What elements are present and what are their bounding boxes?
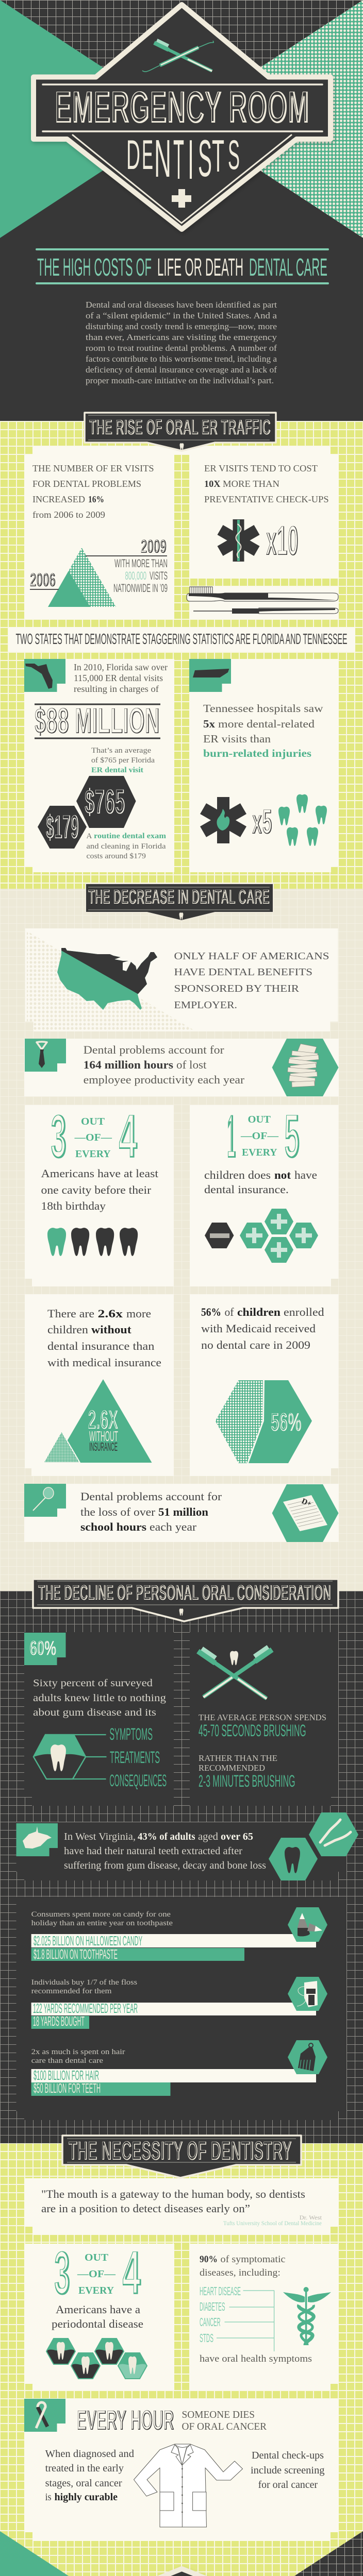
- title: dentists: D: [126, 132, 140, 178]
- text: sixty percent: Sixty percent of surveyed: [33, 1677, 153, 1689]
- intro paragraph: room to treat routine dental problems. A number of: [86, 343, 277, 353]
- text: west virginia: over 65: [221, 1831, 253, 1842]
- text: floss: Individuals buy 1/7 of the floss: [31, 1978, 137, 1987]
- stat: 3 out of every 4 periodontal: [54, 2239, 141, 2308]
- text: periodontal disease: [52, 2303, 143, 2330]
- bar chart: hair vs teeth: $100 BILLION FOR HAIR: [34, 2067, 99, 2083]
- text: highly curable: stages, oral cancer: [45, 2478, 122, 2489]
- stat: 3 out of every 4: —OF—: [74, 1132, 112, 1143]
- text: 90 percent of diseases: 90%: [200, 2254, 218, 2265]
- icon: lab coat: [134, 2444, 242, 2527]
- text: periodontal disease: Americans have a: [56, 2303, 140, 2316]
- section header: the rise of oral er traffic: [85, 413, 276, 451]
- bar chart: hair vs teeth: $50 BILLION FOR TEETH: [34, 2080, 101, 2096]
- text: sixty percent: about gum disease and its: [33, 1707, 156, 1718]
- stat: 3 out of every 4: 3: [51, 1102, 67, 1171]
- icon: four teeth: [47, 1228, 138, 1256]
- stat: 1 out of every 5: EVERY: [242, 1147, 277, 1158]
- icon: tooth and pliers hexagons: [269, 1812, 358, 1880]
- text: school hours: school hours: [80, 1520, 146, 1533]
- icon: plus and minus hexagons: [205, 1209, 318, 1263]
- intro paragraph: disturbing and costly trend is emerging—now, more: [86, 321, 277, 331]
- intro paragraph: Dental and oral diseases have been identified as part: [86, 300, 277, 310]
- text: er visits increased: from 2006 to 2009: [32, 510, 105, 520]
- section 3 panels: [24, 928, 339, 1542]
- title: dentists: T: [173, 128, 184, 191]
- text: school hours: the loss of over: [80, 1505, 156, 1518]
- text: 2.6x more children: 2.6x: [98, 1307, 123, 1320]
- footer background triangles: [0, 2531, 363, 2576]
- text: 56 percent medicaid: with Medicaid received: [201, 1322, 316, 1335]
- text: 56 percent medicaid: of: [225, 1306, 234, 1318]
- intro paragraph: proper mouth-care initiative on the individual’s part.: [86, 376, 274, 385]
- icon: crossed toothbrushes with tooth: [196, 1644, 274, 1701]
- stat: 3 out of every 4: 4: [119, 1102, 138, 1171]
- text: average per visit: [91, 747, 155, 774]
- text: er visits increased: 16%: [88, 494, 104, 504]
- text: florida er visits: 115,000 ER dental visits: [74, 673, 163, 683]
- stat: 1 out of every 5: OUT: [248, 1114, 271, 1125]
- quote: "The mouth is a gateway to the human body, so dentists: [41, 2188, 305, 2200]
- icon: cost hexagons: $765: [85, 783, 125, 821]
- chart: rising triangle 2006 to 2009: WITH MORE THAN: [114, 557, 168, 570]
- text: lost productivity: Dental problems account for: [84, 1043, 224, 1056]
- chart: rising triangle 2006 to 2009: VISITS: [150, 569, 168, 582]
- text: brushing time: RATHER THAN THE: [199, 1753, 277, 1763]
- stat block: 60 percent: 60%: [30, 1637, 56, 1659]
- text: 90 percent of diseases: [200, 2254, 286, 2278]
- stat: 88 million: [35, 701, 160, 741]
- intro paragraph: than ever, Americans are visiting the emergency: [86, 332, 277, 342]
- text: west virginia: suffering from gum disease, decay and bone loss: [64, 1860, 266, 1871]
- stat: 3 out of every 4: [51, 1102, 138, 1171]
- subtitle: LIFE OR DEATH: [157, 254, 243, 281]
- text: west virginia: have had their natural teeth extracted after: [64, 1845, 242, 1857]
- text: oral health symptoms: have oral health symptoms: [200, 2353, 312, 2364]
- text: 2.6x more children: with medical insurance: [47, 1356, 161, 1369]
- list: diseases with lines: HEART DISEASE: [200, 2284, 241, 2298]
- icon: necktie: [25, 1039, 66, 1072]
- title badge: S: [228, 132, 240, 178]
- text: er visits cost: ER VISITS TEND TO COST: [204, 463, 318, 473]
- chart: 56 percent hexagon: 56%: [271, 1409, 302, 1436]
- text: lost productivity: 164 million hours: [84, 1058, 173, 1071]
- chart: 2.6x triangles: [43, 1379, 152, 1463]
- text: school hours: [80, 1490, 222, 1533]
- section 5 panels: [24, 2178, 339, 2541]
- bar chart: floss: [31, 2001, 316, 2029]
- text: 56 percent medicaid: enrolled: [284, 1306, 324, 1318]
- conclusion badge: [33, 2569, 329, 2576]
- quote: are in a position to detect diseases early on”: [41, 2202, 250, 2215]
- text: school hours: each year: [150, 1520, 197, 1533]
- text: 90 percent of diseases: of symptomatic: [221, 2254, 286, 2265]
- text: dental check-ups: [251, 2450, 325, 2490]
- text: cavities: 18th birthday: [41, 1199, 106, 1212]
- text: children no insurance: have: [294, 1168, 317, 1181]
- text: er visits cost: [204, 463, 329, 504]
- text: 56 percent medicaid: 56%: [201, 1306, 221, 1318]
- text: floss: [31, 1978, 137, 1995]
- text: 56 percent medicaid: no dental care in 2009: [201, 1338, 310, 1351]
- text: 56 percent medicaid: children: [237, 1306, 280, 1318]
- stat: 1 out of every 5: —OF—: [240, 1130, 279, 1142]
- text: cavities: one cavity before their: [41, 1183, 152, 1196]
- text: brushing time: RECOMMENDED: [199, 1763, 265, 1773]
- text: highly curable: is: [45, 2492, 52, 2503]
- icon: toothbrush and hook comparison: [187, 587, 338, 614]
- title: dentists: N: [154, 129, 171, 188]
- icon: crossed toothbrush and dental hook: [142, 38, 214, 73]
- section background: decrease in dental care: [0, 889, 363, 1591]
- icon: candy corn hexagon: [288, 1907, 327, 1942]
- bar chart: hair vs teeth: [31, 2067, 316, 2096]
- text: average per visit: of $765 per Florida: [91, 756, 155, 765]
- text: florida er visits: In 2010, Florida saw over: [74, 662, 168, 672]
- text: cavities: [41, 1167, 158, 1212]
- quote: [41, 2188, 322, 2227]
- text: 2.6x more children: dental insurance than: [47, 1340, 155, 1352]
- text: lost productivity: of lost: [176, 1058, 206, 1071]
- text: 2.6x more children: children: [47, 1323, 88, 1336]
- text: only half of americans: ONLY HALF OF AMERICANS: [174, 951, 329, 962]
- section header: the necessity of dentistry: [62, 2136, 301, 2178]
- chart: rising triangle 2006 to 2009: 2009: [141, 536, 167, 557]
- icon: mirror: [24, 1484, 66, 1517]
- icon: star of life with flame x5: [200, 797, 272, 843]
- subtitle: THE HIGH COSTS OF: [37, 254, 152, 281]
- map: half of america: [27, 931, 194, 1030]
- text: 56 percent medicaid: [201, 1306, 324, 1351]
- icon: paper stack hexagon: [272, 1039, 338, 1096]
- stat: 3 out of every 4 periodontal: 4: [122, 2239, 141, 2308]
- quote: Tufts University School of Dental Medicine: [223, 2219, 322, 2227]
- intro paragraph: factors contribute to this worrisome trend, including a: [86, 354, 277, 364]
- text: only half of americans: [174, 951, 329, 1011]
- icon: west virginia: [16, 1823, 58, 1856]
- text: children no insurance: dental insurance.: [204, 1183, 289, 1196]
- chart: 2.6x triangles: 2.6X: [88, 1405, 118, 1434]
- text: average per visit: That’s an average: [91, 747, 151, 755]
- bar chart: candy vs toothpaste: $1.8 BILLION ON TOOTHPASTE: [34, 1946, 118, 1962]
- icon: caduceus: [283, 2287, 331, 2345]
- title: dentists: [126, 128, 240, 191]
- text: only half of americans: SPONSORED BY THEIR: [174, 983, 300, 994]
- list: diseases with lines: DIABETES: [200, 2300, 225, 2313]
- text: periodontal disease: periodontal disease: [52, 2317, 143, 2330]
- text: highly curable: treated in the early: [45, 2463, 124, 2474]
- text: tennessee: burn-related injuries: [203, 747, 311, 759]
- icon: tooth with gum and labels: [34, 1725, 167, 1790]
- text: er visits cost: MORE THAN: [223, 479, 279, 489]
- icon: tooth with gum and labels: SYMPTOMS: [109, 1725, 153, 1743]
- subtitle: [37, 249, 328, 283]
- chart: 56 percent hexagon: [216, 1380, 312, 1463]
- icon: five green teeth: [278, 794, 327, 846]
- stat: 1 out of every 5: 1: [227, 1102, 236, 1171]
- title badge: [34, 5, 331, 229]
- chart: 2.6x triangles: WITHOUT: [89, 1428, 118, 1444]
- heading: every hour: SOMEONE DIES: [182, 2409, 255, 2420]
- icon: comb hexagon: [288, 2040, 327, 2074]
- text: children no insurance: children does: [204, 1168, 271, 1181]
- text: tennessee: ER visits than: [203, 733, 271, 745]
- text: x10: [266, 518, 299, 564]
- list: diseases with lines: CANCER: [200, 2315, 221, 2329]
- stat: 3 out of every 4: EVERY: [75, 1148, 111, 1160]
- text: only half of americans: EMPLOYER.: [174, 999, 237, 1011]
- heading: every hour: OF ORAL CANCER: [182, 2421, 267, 2432]
- text: brushing time: THE AVERAGE PERSON SPENDS: [199, 1713, 326, 1722]
- text: school hours: Dental problems account for: [80, 1490, 222, 1503]
- chart: rising triangle 2006 to 2009: [30, 536, 168, 607]
- icon: four gum hexagons: [46, 2338, 147, 2379]
- text: 2.6x more children: without: [91, 1323, 131, 1336]
- icon: tooth with gum and labels: TREATMENTS: [110, 1748, 160, 1767]
- text: west virginia: aged: [198, 1831, 218, 1842]
- text: floss: recommended for them: [31, 1987, 112, 1995]
- text: west virginia: In West Virginia,: [64, 1831, 136, 1842]
- text: sixty percent: adults knew little to nothing: [33, 1692, 166, 1704]
- text: 90 percent of diseases: diseases, including:: [200, 2267, 280, 2278]
- text: west virginia: 43% of adults: [138, 1831, 195, 1842]
- text: er visits cost: 10X: [204, 479, 221, 489]
- icon: awareness ribbon: [24, 2399, 65, 2432]
- section header: the decline of personal oral consideration: [33, 1579, 338, 1621]
- text: cavities: Americans have at least: [41, 1167, 158, 1180]
- text: routine dental exam: [87, 832, 167, 860]
- text: routine dental exam: and cleaning in Florida: [87, 842, 166, 851]
- stat: 1 out of every 5: [227, 1102, 300, 1171]
- chart: rising triangle 2006 to 2009: 2006: [30, 569, 56, 590]
- text: er visits increased: THE NUMBER OF ER VISITS: [32, 463, 154, 473]
- text: dental check-ups: Dental check-ups: [252, 2450, 324, 2461]
- text: tennessee: [203, 702, 323, 759]
- icon: floss box hexagon: [288, 1977, 327, 2011]
- text: hair vs dental: [31, 2048, 125, 2065]
- chart: 2.6x triangles: INSURANCE: [89, 1440, 118, 1453]
- text: florida er visits: [74, 662, 168, 694]
- stat: 3 out of every 4 periodontal: 3: [54, 2239, 71, 2308]
- text: tennessee: more dental-related: [218, 718, 315, 730]
- text: lost productivity: [84, 1043, 245, 1086]
- text: 2.6x more children: [47, 1307, 161, 1369]
- text: dental check-ups: include screening: [251, 2465, 325, 2476]
- text: only half of americans: HAVE DENTAL BENEFITS: [174, 967, 312, 978]
- icon: florida: [24, 659, 65, 692]
- stat: 88 million: $88 MILLION: [35, 701, 160, 741]
- text: CONSEQUENCES: [109, 1771, 167, 1790]
- text: routine dental exam: A: [87, 832, 92, 840]
- text: candy vs toothpaste: Consumers spent more on candy for one: [31, 1910, 171, 1919]
- title: dentists: S: [198, 130, 212, 188]
- text: children no insurance: [204, 1168, 317, 1196]
- title: dentists: T: [212, 130, 224, 181]
- section background: necessity of dentistry: [0, 2143, 363, 2576]
- stat: 3 out of every 4 periodontal: —OF—: [77, 2268, 116, 2280]
- text: routine dental exam: costs around $179: [87, 852, 146, 860]
- bar chart: candy vs toothpaste: [31, 1933, 316, 1962]
- icon: tennessee: [189, 659, 231, 692]
- title: dentists: I: [188, 128, 194, 191]
- stat: 3 out of every 4 periodontal: OUT: [85, 2252, 109, 2263]
- text: school hours: 51 million: [158, 1505, 208, 1518]
- section background: decline of personal oral consideration: [0, 1591, 363, 2143]
- text: west virginia: [64, 1831, 266, 1871]
- chart: rising triangle 2006 to 2009: 800,000: [125, 569, 146, 582]
- text: lost productivity: employee productivity each year: [84, 1073, 245, 1086]
- text: hair vs dental: care than dental care: [31, 2057, 103, 2065]
- text: routine dental exam: routine dental exam: [94, 832, 167, 840]
- section background: rise of oral er traffic: [0, 421, 363, 889]
- text: tennessee: Tennessee hospitals saw: [203, 702, 323, 715]
- list: diseases with lines: STDS: [200, 2331, 213, 2345]
- header background triangles: [0, 0, 363, 421]
- bar chart: floss: 122 YARDS RECOMMENDED PER YEAR: [33, 2001, 138, 2016]
- icon: star of life with flame x5: x5: [252, 803, 272, 841]
- section 2 panels: [8, 446, 355, 872]
- stat: 3 out of every 4 periodontal: EVERY: [78, 2285, 114, 2296]
- bar chart: candy vs toothpaste: $2.025 BILLION ON HALLOWEEN CANDY: [34, 1933, 142, 1948]
- intro paragraph: [86, 300, 277, 385]
- heading: every hour: EVERY HOUR: [77, 2405, 174, 2436]
- text: er visits increased: [32, 463, 154, 520]
- stat block: 60 percent: [24, 1633, 66, 1665]
- text: highly curable: [45, 2448, 134, 2503]
- text: er visits increased: INCREASED: [32, 494, 85, 504]
- text: tennessee: 5x: [203, 718, 216, 730]
- icon: cost hexagons: [38, 776, 136, 849]
- title: dentists: E: [142, 132, 153, 178]
- text: children no insurance: not: [274, 1168, 291, 1181]
- intro paragraph: deficiency of dental insurance coverage and a lack of: [86, 365, 277, 375]
- text: florida er visits: resulting in charges of: [74, 684, 159, 694]
- icon: plus: [172, 189, 191, 208]
- section 4 panels: [16, 1632, 346, 2120]
- list: diseases with lines: [200, 2284, 274, 2351]
- text: highly curable: highly curable: [55, 2492, 118, 2503]
- text: hair vs dental: 2x as much is spent on hair: [31, 2048, 125, 2056]
- icon: star of life x10: [217, 518, 299, 564]
- text: 5: [284, 1102, 300, 1171]
- section header: the decrease in dental care: [86, 884, 273, 921]
- text: 2.6x more children: There are: [47, 1307, 94, 1320]
- text: highly curable: When diagnosed and: [45, 2448, 134, 2460]
- text: candy vs toothpaste: [31, 1910, 173, 1927]
- bar chart: floss: 18 YARDS BOUGHT: [33, 2013, 85, 2029]
- quote: Dr. West: [300, 2214, 322, 2221]
- icon: graded paper hexagon: D+: [301, 1497, 312, 1509]
- icon: cost hexagons: $179: [46, 808, 79, 845]
- text: dental check-ups: for oral cancer: [258, 2479, 318, 2490]
- chart: rising triangle 2006 to 2009: NATIONWIDE IN ’09: [113, 582, 168, 595]
- text: er visits increased: FOR DENTAL PROBLEMS: [32, 479, 141, 489]
- text: 2.6x more children: more: [126, 1307, 151, 1320]
- icon: graded paper hexagon: [272, 1484, 338, 1542]
- text: candy vs toothpaste: holiday than an entire year on toothpaste: [31, 1919, 173, 1927]
- text: er visits cost: PREVENTATIVE CHECK-UPS: [204, 494, 329, 504]
- text: brushing time: [199, 1713, 326, 1790]
- text: average per visit: ER dental visit: [91, 766, 143, 774]
- intro paragraph: of a “silent epidemic” in the United States. And a: [86, 311, 277, 320]
- text: sixty percent: [33, 1677, 166, 1718]
- stat: 3 out of every 4: OUT: [81, 1116, 105, 1127]
